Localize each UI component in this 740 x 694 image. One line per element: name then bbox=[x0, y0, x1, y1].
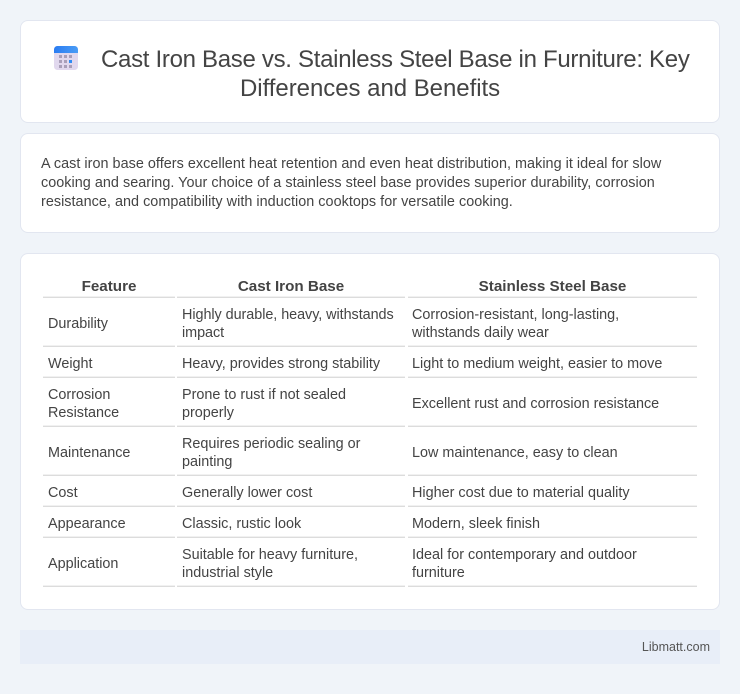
row: application: furniture bbox=[412, 565, 465, 581]
row: maintenance: Maintenance bbox=[48, 445, 130, 461]
panel: header bbox=[20, 20, 720, 123]
row: maintenance: Requires periodic sealing or bbox=[182, 436, 360, 452]
row: application bbox=[43, 547, 697, 587]
row: weight bbox=[43, 356, 697, 378]
row: cost: Higher cost due to material quality bbox=[412, 485, 630, 501]
table header: Cast Iron Base bbox=[238, 278, 344, 295]
row: durability: withstands daily wear bbox=[412, 325, 549, 341]
footer bar bbox=[20, 630, 720, 664]
panel: header: Cast Iron Base vs. Stainless Steel Base in Furniture: Key bbox=[101, 46, 690, 73]
row: corrosion resistance: Corrosion bbox=[48, 387, 110, 403]
table header: Feature bbox=[82, 278, 136, 295]
row: corrosion resistance bbox=[43, 387, 697, 427]
row: durability: Corrosion-resistant, long-lasting, bbox=[412, 307, 619, 323]
title bbox=[101, 46, 690, 102]
row: appearance bbox=[43, 516, 697, 538]
row: durability: Highly durable, heavy, withstands bbox=[182, 307, 394, 323]
table header bbox=[43, 278, 697, 298]
panel: comparison table bbox=[20, 253, 720, 610]
row: durability: Durability bbox=[48, 316, 108, 332]
intro text: A cast iron base offers excellent heat retention and even heat distribution, making it ideal for slow bbox=[41, 156, 661, 172]
intro text: cooking and searing. Your choice of a stainless steel base provides superior durability, corrosion bbox=[41, 175, 655, 191]
row: appearance: Classic, rustic look bbox=[182, 516, 301, 532]
row: application: Ideal for contemporary and outdoor bbox=[412, 547, 637, 563]
row: weight: Heavy, provides strong stability bbox=[182, 356, 380, 372]
panel: introduction bbox=[20, 133, 720, 233]
row: durability bbox=[43, 307, 697, 347]
icon: calendar bbox=[54, 46, 78, 70]
row: durability: impact bbox=[182, 325, 224, 341]
row: application: industrial style bbox=[182, 565, 273, 581]
row: corrosion resistance: Excellent rust and corrosion resistance bbox=[412, 396, 659, 412]
row: maintenance bbox=[43, 436, 697, 476]
footer text: Libmatt.com: Libmatt.com bbox=[642, 640, 710, 654]
row: weight: Light to medium weight, easier to move bbox=[412, 356, 662, 372]
row: maintenance: Low maintenance, easy to clean bbox=[412, 445, 618, 461]
row: cost: Generally lower cost bbox=[182, 485, 312, 501]
row: application: Application bbox=[48, 556, 118, 572]
row: cost: Cost bbox=[48, 485, 78, 501]
row: appearance: Appearance bbox=[48, 516, 126, 532]
table header: Stainless Steel Base bbox=[479, 278, 626, 295]
row: appearance: Modern, sleek finish bbox=[412, 516, 540, 532]
row: application: Suitable for heavy furniture, bbox=[182, 547, 358, 563]
intro text bbox=[41, 156, 662, 210]
intro text: resistance, and compatibility with induction cooktops for versatile cooking. bbox=[41, 194, 513, 210]
panel: header: Differences and Benefits bbox=[240, 75, 500, 102]
row: corrosion resistance: Prone to rust if not sealed bbox=[182, 387, 346, 403]
row: corrosion resistance: Resistance bbox=[48, 405, 119, 421]
row: weight: Weight bbox=[48, 356, 93, 372]
row: maintenance: painting bbox=[182, 454, 232, 470]
row: corrosion resistance: properly bbox=[182, 405, 234, 421]
row: cost bbox=[43, 485, 697, 507]
